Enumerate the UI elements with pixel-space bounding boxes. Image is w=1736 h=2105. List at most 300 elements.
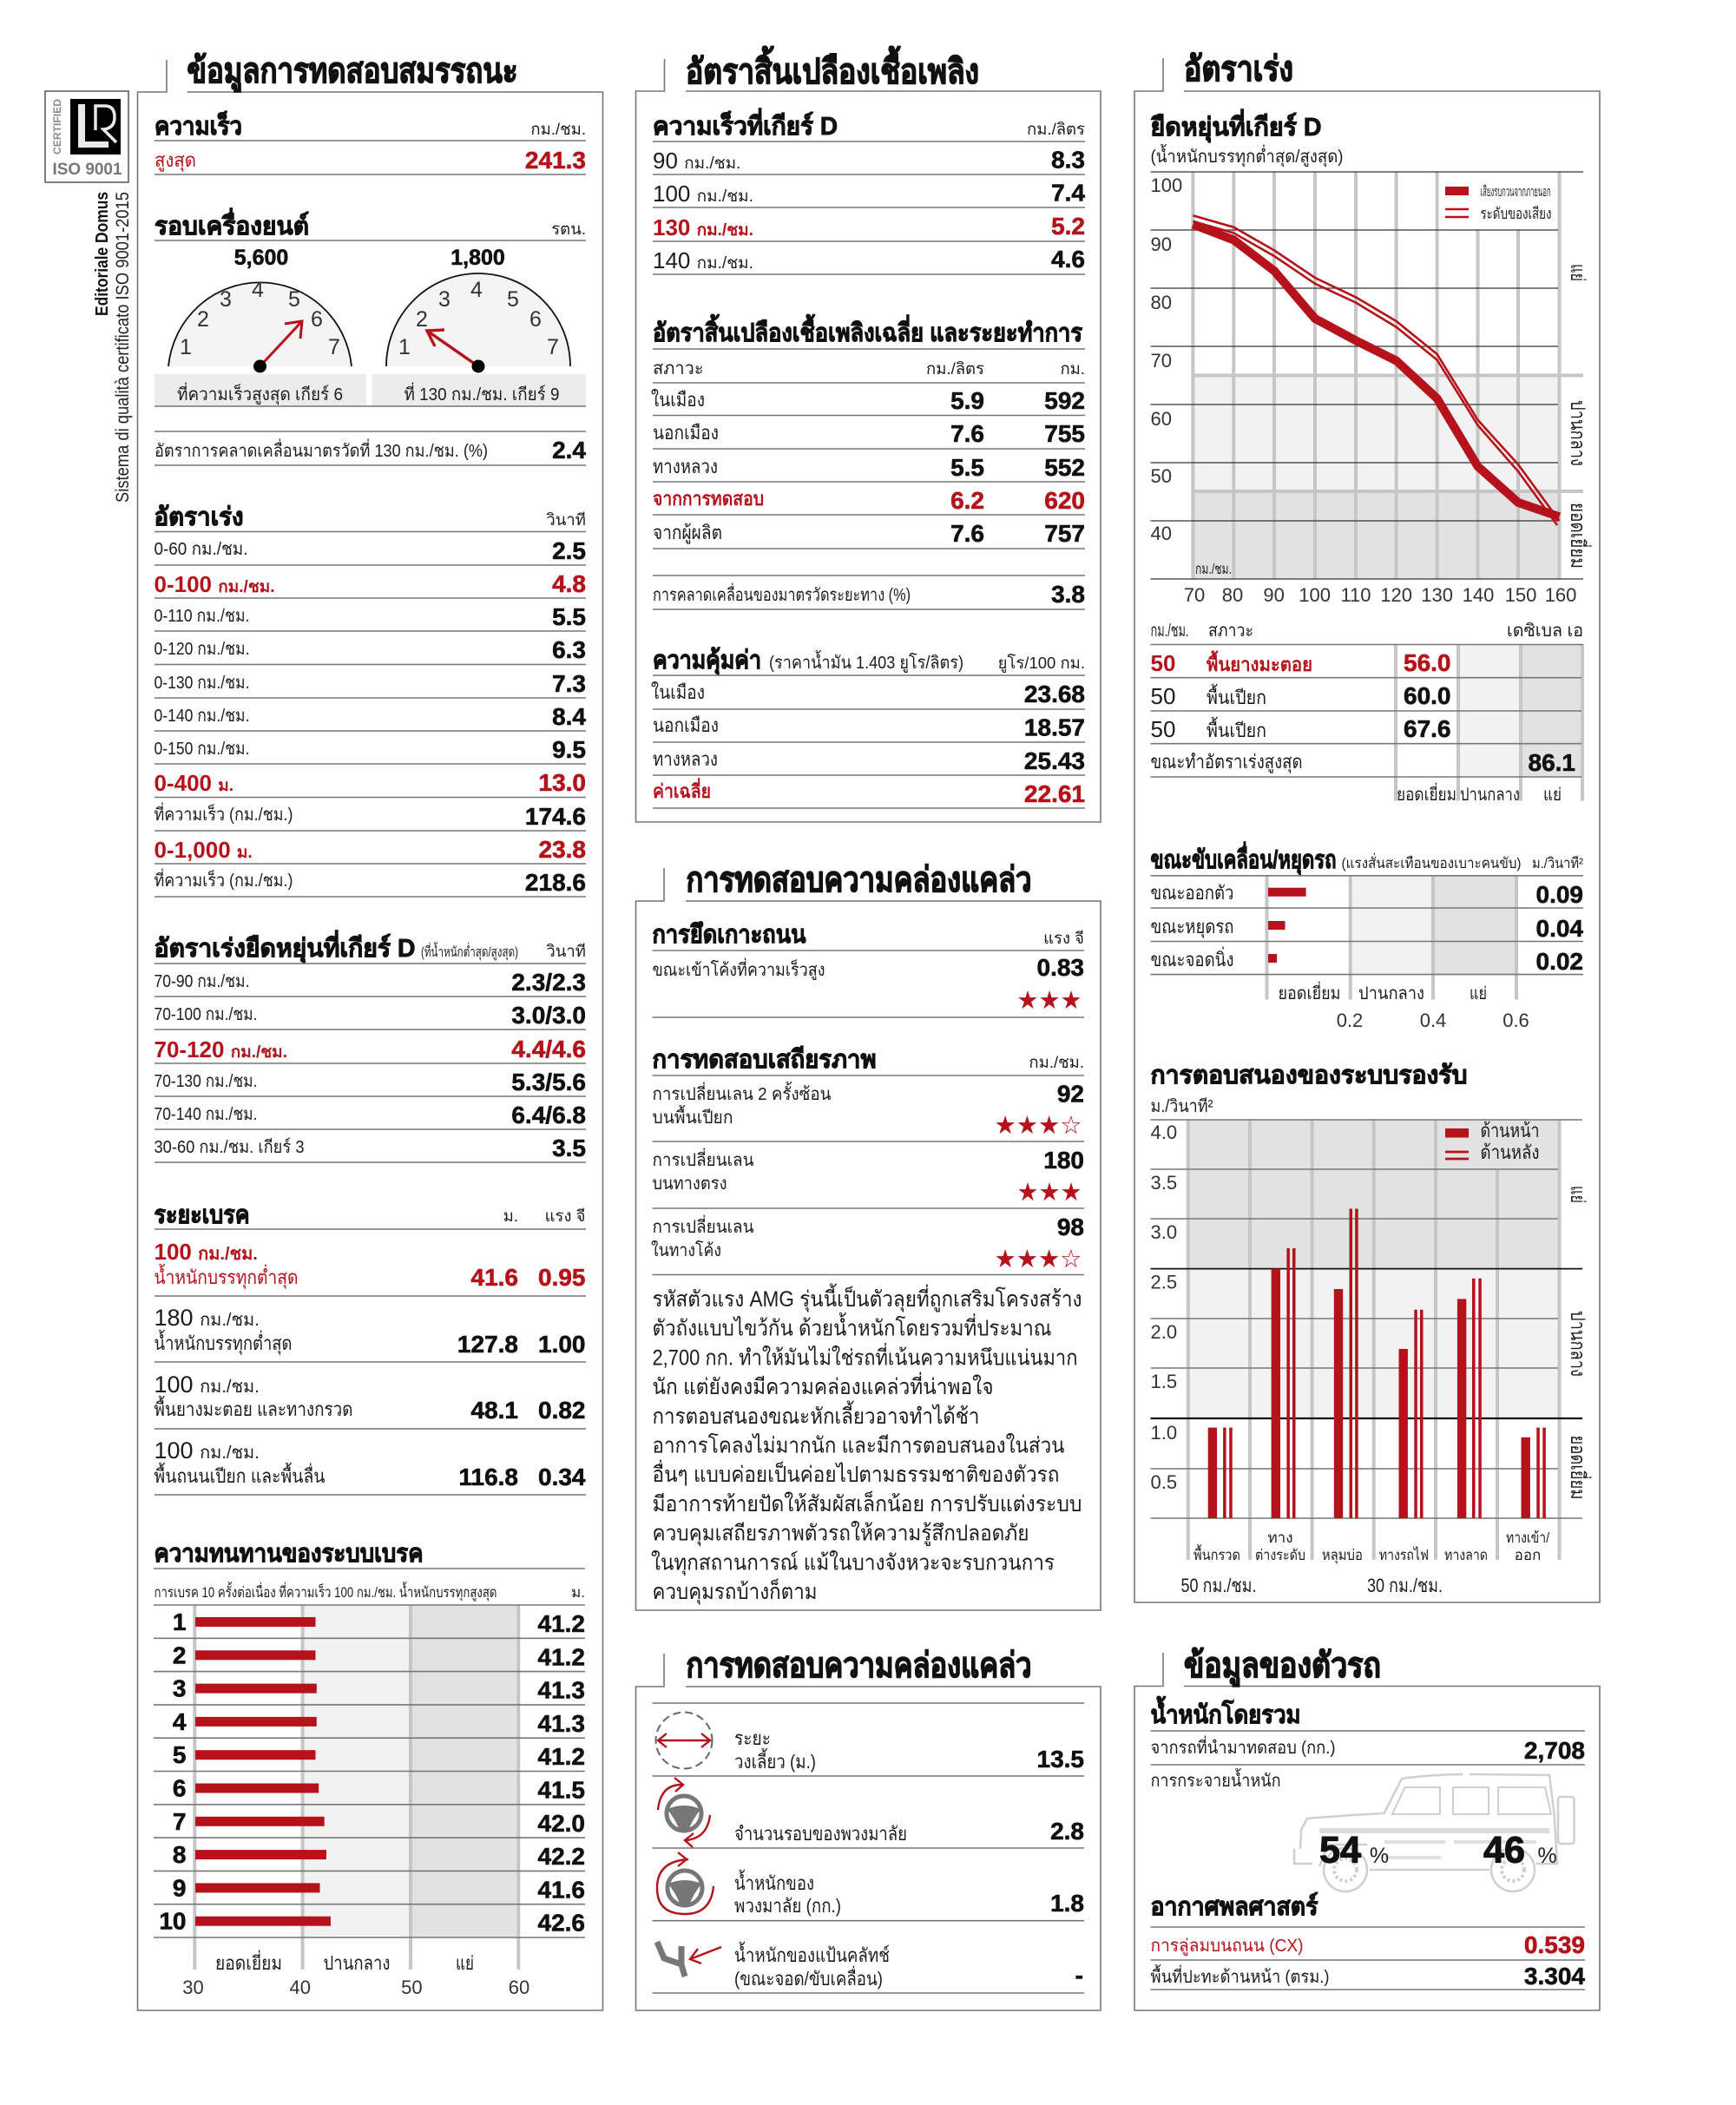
steering turns row <box>734 1818 1084 1845</box>
noise table: ยอดเยี่ยม <box>1397 782 1457 805</box>
acceleration table: 23.8 <box>538 836 586 863</box>
acceleration table: ที่ความเร็ว (กม./ชม.) <box>155 868 293 891</box>
row values: 42.6 <box>538 1910 585 1937</box>
review paragraph: ในทุกสถานการณ์ แม้ในบางจังหวะจะรบกวนการ <box>651 1549 1055 1575</box>
average consumption and range table: 7.6 <box>950 420 984 447</box>
heading: performance data: ข้อมูลการทดสอบสมรรถนะ <box>187 52 517 92</box>
y axis labels: 80 <box>1151 292 1172 313</box>
vibration bar chart: ปานกลาง <box>1358 984 1424 1003</box>
legend <box>1445 184 1552 222</box>
noise table: พื้นเปียก <box>1207 684 1266 708</box>
brake endurance chart: ม. <box>571 1584 585 1601</box>
gauge: 1,800 rpm: 1 <box>398 335 411 359</box>
braking distance table: 127.8 <box>457 1331 518 1358</box>
noise table: 86.1 <box>1528 749 1575 776</box>
average consumption and range table: สภาวะ <box>653 359 704 378</box>
odometer deviation row: 3.8 <box>1051 581 1085 608</box>
clutch pedal row: (ขณะจอด/ขับเคลื่อน) <box>734 1965 883 1990</box>
y axis labels: 2.0 <box>1151 1321 1177 1343</box>
subheading: noise chart: ยืดหยุ่นที่เกียร์ D <box>1150 109 1321 142</box>
steering turns row: จำนวนรอบของพวงมาลัย <box>734 1823 907 1845</box>
gauge: 5,600 rpm: 7 <box>328 335 340 359</box>
x axis labels: 80 <box>1222 584 1243 606</box>
vibration bars <box>1268 888 1306 963</box>
in-gear acceleration table: 4.4/4.6 <box>511 1036 586 1062</box>
suspension response bar chart: 30 กม./ชม. <box>1367 1575 1443 1596</box>
average consumption and range table: จากผู้ผลิต <box>653 522 722 544</box>
y axis labels: 60 <box>1151 408 1172 430</box>
speed table: สูงสุด <box>155 149 196 172</box>
acceleration table: 0-150 กม./ชม. <box>155 740 250 759</box>
vibration bar chart: ยอดเยี่ยม <box>1278 981 1340 1003</box>
stability tests: บนพื้นเปียก <box>653 1105 733 1128</box>
noise table: 50 <box>1151 716 1175 742</box>
acceleration table: 8.4 <box>552 703 586 730</box>
icon: steering wheel weight <box>657 1852 713 1914</box>
noise table: แย่ <box>1543 786 1562 805</box>
gauge: 5,600 rpm: ที่ความเร็วสูงสุด เกียร์ 6 <box>177 382 343 405</box>
average consumption and range table: ทางหลวง <box>653 456 718 477</box>
y axis labels <box>1151 174 1182 544</box>
vibration bar chart: 0.4 <box>1420 1010 1446 1031</box>
category labels: ทาง <box>1267 1529 1293 1546</box>
icon: steering wheel turns <box>658 1778 710 1847</box>
row numbers <box>159 1608 187 1935</box>
average consumption and range table: 757 <box>1044 520 1085 547</box>
consumption at constant speed table: 7.4 <box>1051 179 1085 207</box>
brake endurance chart: 60 <box>509 1977 529 1998</box>
noise table: 67.6 <box>1404 715 1451 742</box>
braking distance table: ระยะเบรค <box>155 1201 250 1229</box>
row values: 42.0 <box>538 1810 585 1837</box>
gauge: 1,800 rpm: 6 <box>529 307 542 332</box>
gauge: 5,600 rpm: 2 <box>197 307 209 332</box>
stability tests: การเปลี่ยนเลน <box>653 1214 754 1237</box>
row numbers: 2 <box>173 1641 186 1668</box>
brake endurance chart: ยอดเยี่ยม <box>215 1950 282 1974</box>
y axis labels: 4.0 <box>1151 1122 1177 1143</box>
vibration bar chart: ม./วินาที² <box>1532 855 1583 872</box>
speedometer deviation row: 2.4 <box>552 437 586 464</box>
rotated rating labels: แย่ <box>1567 1186 1589 1203</box>
rotated rating labels <box>1567 264 1592 569</box>
stability tests: การเปลี่ยนเลน <box>653 1148 754 1170</box>
row numbers: 8 <box>173 1841 186 1868</box>
stability tests: ในทางโค้ง <box>651 1240 721 1260</box>
braking distance table: ม. <box>503 1207 518 1225</box>
braking distance table: พื้นยางมะตอย และทางกรวด <box>155 1396 352 1420</box>
x axis labels: 100 <box>1299 584 1331 606</box>
vibration bar chart: ขณะหยุดรถ <box>1151 916 1234 938</box>
speed table <box>155 110 586 174</box>
y axis labels: 90 <box>1151 234 1172 255</box>
acceleration table: 218.6 <box>525 869 586 896</box>
steering weight row <box>734 1870 1084 1917</box>
average consumption and range table: 6.2 <box>950 487 984 514</box>
review paragraph: อาการโคลงไม่มากนัก และมีการตอบสนองในส่วน <box>653 1432 1064 1458</box>
suspension response bar chart: ม./วินาที² <box>1151 1097 1213 1116</box>
braking distance table: 180 กม./ชม. <box>155 1305 260 1331</box>
acceleration table: วินาที <box>546 510 586 529</box>
braking distance table: 100 กม./ชม. <box>155 1437 260 1464</box>
category labels: พื้นกรวด <box>1194 1544 1240 1563</box>
stability tests <box>651 1046 1084 1274</box>
line chart: noise against speed: กม./ชม. <box>1195 561 1232 577</box>
external noise curve <box>1193 224 1559 516</box>
total weight: การกระจายน้ำหนัก <box>1151 1768 1281 1791</box>
x axis labels: 130 <box>1421 584 1453 606</box>
clutch pedal row: - <box>1075 1962 1083 1989</box>
speedometer deviation row: อัตราการคลาดเคลื่อนมาตรวัดที่ 130 กม./ชม. (%) <box>155 438 488 461</box>
panel: vehicle data <box>1134 1647 1600 2010</box>
odometer deviation row <box>653 576 1085 609</box>
review paragraph: ควบคุมเสถียรภาพตัวรถให้ความรู้สึกปลอดภัย <box>653 1521 1029 1547</box>
category labels: ทางเข้า/ <box>1506 1529 1549 1546</box>
average consumption and range table: ในเมือง <box>651 389 705 411</box>
panel: performance data <box>137 52 602 2010</box>
acceleration table <box>155 503 586 897</box>
rotated rating labels: ยอดเยี่ยม <box>1567 1436 1592 1500</box>
clutch pedal row: น้ำหนักของแป้นคลัทช์ <box>734 1942 890 1966</box>
turning circle row: 13.5 <box>1036 1746 1084 1773</box>
total weight <box>1151 1695 1585 1791</box>
cost table <box>651 647 1085 808</box>
acceleration table: 0-140 กม./ชม. <box>155 707 250 726</box>
brake endurance chart: 30 <box>182 1977 204 1998</box>
average consumption and range table: 552 <box>1044 454 1085 481</box>
suspension response bar chart: การตอบสนองของระบบรองรับ <box>1151 1062 1467 1089</box>
average consumption and range table: นอกเมือง <box>653 422 719 444</box>
speedometer deviation row <box>155 431 586 465</box>
noise table: ปานกลาง <box>1460 786 1520 805</box>
acceleration table: 5.5 <box>552 603 586 630</box>
vertical certification text: Editoriale Domus <box>93 192 112 316</box>
category labels: ทางลาด <box>1444 1547 1488 1563</box>
stability tests: การเปลี่ยนเลน 2 ครั้งซ้อน <box>653 1082 832 1104</box>
stability tests: 180 <box>1043 1147 1084 1174</box>
in-gear acceleration table: 70-130 กม./ชม. <box>155 1072 257 1091</box>
consumption at constant speed table: กม./ลิตร <box>1027 120 1085 138</box>
in-gear acceleration table: (ที่น้ำหนักต่ำสุด/สูงสุด) <box>421 942 518 961</box>
braking distance table: แรง จี <box>545 1207 585 1225</box>
gauge: 1,800 rpm: 1,800 <box>450 246 505 270</box>
stability tests: 92 <box>1057 1080 1084 1108</box>
steering weight row: พวงมาลัย (กก.) <box>734 1895 841 1917</box>
braking distance table: 0.95 <box>538 1264 585 1291</box>
gauge: 1,800 rpm: 2 <box>416 307 428 332</box>
y axis labels: 2.5 <box>1151 1271 1177 1293</box>
average consumption and range table <box>651 313 1085 549</box>
gauge: 5,600 rpm: 5 <box>288 287 300 312</box>
vibration bar chart <box>1151 841 1583 1031</box>
average consumption and range table: 620 <box>1044 487 1085 514</box>
row values: 41.6 <box>538 1876 585 1903</box>
braking distance table: น้ำหนักบรรทุกต่ำสุด <box>155 1330 292 1355</box>
in-gear acceleration table: 6.4/6.8 <box>511 1102 586 1128</box>
braking distance table: พื้นถนนเปียก และพื้นลื่น <box>155 1463 325 1487</box>
acceleration table: 0-60 กม./ชม. <box>155 540 248 559</box>
noise table: 60.0 <box>1404 682 1451 709</box>
panel: acceleration and noise <box>1134 50 1600 1602</box>
row values <box>538 1610 585 1937</box>
consumption at constant speed table: ความเร็วที่เกียร์ D <box>653 108 838 141</box>
engine rpm heading: รอบเครื่องยนต์ <box>155 207 309 240</box>
acceleration table: 4.8 <box>552 570 586 597</box>
stability tests: ★★★☆ <box>995 1110 1082 1140</box>
braking distance table: 48.1 <box>470 1397 518 1424</box>
cost table: ความคุ้มค่า <box>653 647 761 675</box>
acceleration table: 174.6 <box>525 803 586 830</box>
cost table: นอกเมือง <box>653 714 719 736</box>
category labels: ต่างระดับ <box>1255 1547 1305 1563</box>
average consumption and range table: 7.6 <box>950 520 984 547</box>
legend: ด้านหลัง <box>1481 1141 1540 1163</box>
aerodynamics <box>1151 1891 1585 1990</box>
acceleration table: 9.5 <box>552 736 586 763</box>
ISO 9001 certification badge: ISO 9001 <box>52 161 122 179</box>
weight distribution front: % <box>1370 1844 1389 1868</box>
noise table: สภาวะ <box>1208 622 1253 641</box>
in-gear acceleration table: 2.3/2.3 <box>511 969 586 996</box>
weight distribution rear <box>1483 1830 1557 1871</box>
cost table: ยูโร/100 กม. <box>998 654 1085 673</box>
stability tests: กม./ชม. <box>1029 1053 1084 1071</box>
road grip: แรง จี <box>1043 929 1084 947</box>
in-gear acceleration table: 3.0/3.0 <box>511 1002 586 1029</box>
acceleration table: 0-400 ม. <box>155 770 233 796</box>
speed table: ความเร็ว <box>155 110 242 141</box>
review paragraph: รหัสตัวแรง AMG รุ่นนี้เป็นตัวลุยที่ถูกเสริมโครงสร้าง <box>653 1283 1082 1312</box>
braking distance table: 1.00 <box>538 1331 585 1358</box>
legend: ระดับของเสียง <box>1481 205 1552 222</box>
gauge: 5,600 rpm: 1 <box>180 335 192 359</box>
icon: turning circle <box>656 1712 712 1769</box>
cost table: 23.68 <box>1024 681 1085 707</box>
rotated rating labels: ปานกลาง <box>1567 400 1589 466</box>
turning circle row <box>734 1727 1084 1773</box>
rotated rating labels <box>1567 1186 1592 1500</box>
row values: 41.3 <box>538 1677 585 1704</box>
noise table: 56.0 <box>1404 649 1451 676</box>
noise table <box>1151 622 1583 805</box>
heading: acceleration: อัตราเร่ง <box>1184 50 1293 89</box>
line chart: noise against speed: เสียงรบกวนจากภายนอก <box>1481 184 1550 200</box>
turning circle row: ระยะ <box>734 1727 771 1749</box>
average consumption and range table: 5.9 <box>950 387 984 414</box>
brake endurance chart: ความทนทานของระบบเบรค <box>155 1540 424 1568</box>
review paragraph: ควบคุมรถบ้างก็ตาม <box>653 1578 818 1605</box>
steering weight row: 1.8 <box>1050 1890 1084 1917</box>
in-gear acceleration table <box>155 930 586 1162</box>
ISO 9001 certification badge: CERTIFIED <box>51 99 63 155</box>
in-gear acceleration table: วินาที <box>546 942 586 960</box>
acceleration table: 0-110 กม./ชม. <box>155 607 250 626</box>
braking distance table: 0.34 <box>538 1464 586 1490</box>
row numbers: 3 <box>173 1675 186 1702</box>
road grip: 0.83 <box>1036 954 1084 981</box>
road grip: ขณะเข้าโค้งที่ความเร็วสูง <box>653 957 825 981</box>
subheading: noise chart <box>1150 109 1344 168</box>
x axis labels: 110 <box>1340 584 1371 606</box>
noise table: กม./ชม. <box>1151 622 1189 641</box>
vibration bar chart: 0.09 <box>1536 881 1583 908</box>
steering weight row: น้ำหนักของ <box>734 1870 814 1894</box>
review paragraph: 2,700 กก. ทำให้มันไม่ใช่รถที่เน้นความหนึบแน่นมาก <box>653 1342 1078 1370</box>
speed table: กม./ชม. <box>530 120 586 138</box>
gauge: 1,800 rpm: 4 <box>470 278 483 302</box>
rotated rating labels: ยอดเยี่ยม <box>1567 503 1592 569</box>
row numbers: 6 <box>173 1774 186 1802</box>
acceleration table: อัตราเร่ง <box>155 503 243 531</box>
consumption at constant speed table: 4.6 <box>1051 246 1085 273</box>
review paragraph: ตัวถังแบบไขว้กัน ด้วยน้ำหนักโดยรวมที่ประมาณ <box>653 1312 1052 1341</box>
braking distance table: 41.6 <box>470 1264 518 1291</box>
cost table: 25.43 <box>1024 747 1085 774</box>
red bars <box>195 1617 331 1926</box>
gauge: 5,600 rpm: 3 <box>220 287 232 312</box>
x axis labels <box>1184 584 1576 606</box>
in-gear acceleration table: 70-90 กม./ชม. <box>155 972 250 991</box>
acceleration table: 0-1,000 ม. <box>155 837 253 863</box>
acceleration table: 6.3 <box>552 636 586 663</box>
cost table: ในเมือง <box>651 681 705 703</box>
speed table: 241.3 <box>525 147 586 174</box>
row numbers: 4 <box>173 1708 187 1735</box>
category labels <box>1194 1529 1549 1564</box>
average consumption and range table: 5.5 <box>950 454 984 481</box>
consumption at constant speed table: 130 กม./ชม. <box>653 214 753 240</box>
y axis labels: 40 <box>1151 523 1172 544</box>
vibration bar chart: 0.2 <box>1337 1010 1363 1031</box>
noise table: ขณะทำอัตราเร่งสูงสุด <box>1151 751 1302 773</box>
sound level double curve <box>1193 215 1559 525</box>
gauge: 1,800 rpm: 7 <box>547 335 559 359</box>
average consumption and range table: จากการทดสอบ <box>653 488 764 510</box>
subheading: noise chart: (น้ำหนักบรรทุกต่ำสุด/สูงสุด) <box>1151 144 1344 168</box>
braking distance table: 100 กม./ชม. <box>155 1372 260 1398</box>
acceleration table: 7.3 <box>552 670 586 697</box>
acceleration table: 0-100 กม./ชม. <box>155 571 275 597</box>
aerodynamics: 0.539 <box>1524 1931 1585 1958</box>
vibration bar chart: 0.02 <box>1536 948 1583 975</box>
gauge: 1,800 rpm: ที่ 130 กม./ชม. เกียร์ 9 <box>404 382 559 405</box>
consumption at constant speed table: 5.2 <box>1051 213 1085 240</box>
vertical certification text <box>93 192 133 503</box>
line chart: noise against speed <box>1151 172 1592 606</box>
stability tests: 98 <box>1057 1214 1084 1240</box>
braking distance table <box>155 1201 586 1495</box>
road grip: ★★★ <box>1017 985 1082 1015</box>
engine rpm heading: รตน. <box>551 220 586 238</box>
clutch pedal row <box>734 1942 1083 1990</box>
aerodynamics: พื้นที่ปะทะด้านหน้า (ตรม.) <box>1151 1964 1330 1987</box>
in-gear acceleration table: 30-60 กม./ชม. เกียร์ 3 <box>155 1137 304 1157</box>
road grip: การยึดเกาะถนน <box>653 921 806 949</box>
cost table: (ราคาน้ำมัน 1.403 ยูโร/ลิตร) <box>769 650 963 674</box>
stability tests: ★★★☆ <box>995 1244 1082 1273</box>
cost table: ค่าเฉลี่ย <box>653 777 711 802</box>
row values: 41.3 <box>538 1710 585 1737</box>
legend <box>1445 1120 1540 1163</box>
brake endurance chart: 40 <box>289 1977 311 1998</box>
braking distance table: 100 กม./ชม. <box>155 1239 258 1265</box>
x axis labels: 90 <box>1263 584 1285 606</box>
panel: handling tests <box>635 861 1101 1610</box>
noise table: 50 <box>1151 683 1175 709</box>
weight distribution front <box>1319 1830 1389 1871</box>
stability tests: ★★★ <box>1017 1177 1082 1207</box>
row values: 41.2 <box>538 1610 585 1637</box>
category labels: ออก <box>1515 1547 1541 1563</box>
row numbers: 7 <box>173 1808 186 1835</box>
acceleration table: 0-130 กม./ชม. <box>155 674 250 693</box>
average consumption and range table: 755 <box>1044 420 1085 447</box>
cost table: 22.61 <box>1024 780 1085 807</box>
consumption at constant speed table: 140 กม./ชม. <box>653 247 753 273</box>
braking distance table: 116.8 <box>458 1464 518 1490</box>
row values: 41.5 <box>538 1776 585 1804</box>
acceleration table: ที่ความเร็ว (กม./ชม.) <box>155 802 293 825</box>
gauge: 5,600 rpm: 6 <box>311 307 323 332</box>
stability tests: บนทางตรง <box>653 1174 727 1194</box>
acceleration table: 0-120 กม./ชม. <box>155 640 250 659</box>
in-gear acceleration table: อัตราเร่งยืดหยุ่นที่เกียร์ D <box>155 930 415 964</box>
weight distribution rear: % <box>1537 1844 1557 1868</box>
y axis labels: 3.5 <box>1151 1172 1177 1194</box>
odometer deviation row: การคลาดเคลื่อนของมาตรวัดระยะทาง (%) <box>653 582 911 605</box>
review paragraph <box>651 1283 1082 1605</box>
vibration bar chart: 0.04 <box>1536 915 1583 942</box>
acceleration table: 13.0 <box>538 769 586 796</box>
weight distribution rear: 46 <box>1483 1830 1525 1871</box>
aerodynamics: 3.304 <box>1524 1963 1585 1990</box>
icon: clutch pedal <box>657 1942 721 1977</box>
heading: handling tests: การทดสอบความคล่องแคล่ว <box>686 861 1031 899</box>
vibration bar chart: แย่ <box>1470 984 1487 1003</box>
y axis labels: 50 <box>1151 465 1172 487</box>
row values: 41.2 <box>538 1643 585 1670</box>
total weight: จากรถที่นำมาทดสอบ (กก.) <box>1151 1735 1335 1758</box>
heading: maneuverability tests: การทดสอบความคล่องแคล่ว <box>686 1647 1031 1685</box>
panel: maneuverability tests <box>635 1647 1101 2010</box>
stability tests: การทดสอบเสถียรภาพ <box>653 1046 877 1074</box>
gauge: 1,800 rpm <box>155 246 586 406</box>
brake endurance chart: แย่ <box>456 1952 474 1974</box>
in-gear acceleration table: 70-140 กม./ชม. <box>155 1105 257 1124</box>
suspension bars <box>1208 1208 1546 1518</box>
braking distance table: น้ำหนักบรรทุกต่ำสุด <box>155 1264 299 1289</box>
acceleration table: 2.5 <box>552 537 586 564</box>
row values: 41.2 <box>538 1743 585 1770</box>
gauge: 5,600 rpm: 5,600 <box>234 246 288 270</box>
row values: 42.2 <box>538 1843 585 1870</box>
average consumption and range table: กม./ลิตร <box>926 359 984 378</box>
legend: ด้านหน้า <box>1481 1120 1540 1141</box>
y axis labels: 1.5 <box>1151 1371 1177 1392</box>
x axis labels: 150 <box>1505 584 1536 606</box>
consumption at constant speed table: 100 กม./ชม. <box>653 181 753 207</box>
heading: fuel consumption: อัตราสิ้นเปลืองเชื้อเพลิง <box>686 46 979 91</box>
in-gear acceleration table: 3.5 <box>552 1135 586 1161</box>
steering turns row: 2.8 <box>1050 1818 1084 1845</box>
suspension response bar chart: 50 กม./ชม. <box>1180 1575 1257 1596</box>
noise table: พื้นยางมะตอย <box>1207 650 1312 675</box>
average consumption and range table: กม. <box>1060 359 1085 378</box>
brake endurance chart <box>154 1540 585 1998</box>
total weight: 2,708 <box>1524 1737 1585 1764</box>
row numbers: 10 <box>159 1908 186 1935</box>
road grip <box>653 921 1084 1017</box>
